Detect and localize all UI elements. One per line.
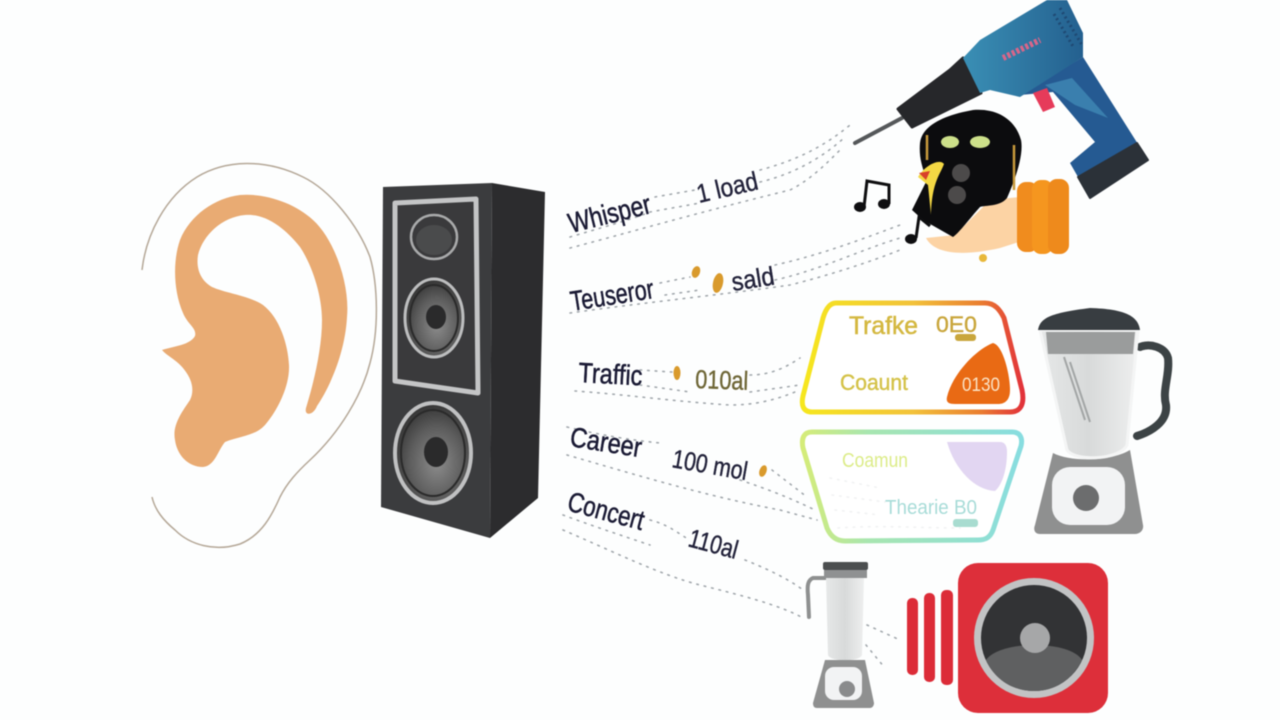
drill battery <box>1078 143 1148 198</box>
device eye <box>970 136 990 148</box>
lid band <box>824 570 867 578</box>
speaker ring <box>974 578 1094 698</box>
drill trigger <box>1033 88 1055 112</box>
tweeter <box>411 215 457 259</box>
speaker cone <box>981 585 1087 691</box>
panel: traffic gradient card <box>802 303 1023 412</box>
value text: 1 load <box>694 166 761 209</box>
row label: Teuseror <box>568 261 776 317</box>
base <box>813 660 874 708</box>
device button <box>948 186 966 204</box>
drill brand mark <box>1003 40 1040 58</box>
card outline <box>802 432 1022 541</box>
panel <box>825 667 862 700</box>
device eye <box>941 136 959 148</box>
icon: tower speaker <box>381 183 545 538</box>
knob <box>839 681 855 697</box>
drill chuck <box>898 58 981 127</box>
icon: power drill <box>855 0 1148 198</box>
sound bar <box>924 593 935 682</box>
icon: large blender <box>1034 308 1168 534</box>
blender jar <box>1040 330 1138 458</box>
icon: ear <box>142 163 376 547</box>
blender handle <box>1137 345 1168 436</box>
label: Coaunt <box>840 370 908 395</box>
value drop <box>711 272 725 294</box>
arm <box>926 197 1025 253</box>
value text: 100 mol <box>670 443 750 486</box>
speaker body <box>958 563 1108 713</box>
side stripe <box>927 135 1014 190</box>
blender lid <box>1038 308 1140 330</box>
bead <box>979 254 987 262</box>
icon: small blender <box>808 562 874 708</box>
card outline <box>802 303 1023 412</box>
blender blade mark <box>1064 357 1090 422</box>
speaker front <box>381 183 492 538</box>
label: Thearie B0 <box>885 497 977 519</box>
drill bit <box>855 118 902 143</box>
note stems <box>864 181 889 207</box>
drill handle <box>1020 57 1148 198</box>
label: Coamun <box>842 450 908 472</box>
drill handle highlight <box>1045 78 1108 118</box>
blender knob <box>1073 485 1099 511</box>
yellow beak <box>918 162 944 215</box>
sound bar <box>907 598 918 675</box>
small value <box>955 334 976 341</box>
ear outer outline <box>142 163 376 547</box>
device body <box>912 110 1022 237</box>
drill rear vents <box>1054 8 1082 48</box>
blender panel <box>1052 467 1125 525</box>
icon: hand with orange cuff <box>926 179 1069 262</box>
cuff band <box>1017 182 1038 252</box>
row label: Career <box>568 421 768 486</box>
blender band <box>1046 332 1135 354</box>
lavender shape <box>947 442 1007 491</box>
label text: Concert <box>564 486 648 536</box>
cuff band <box>1048 179 1069 254</box>
dotted connector lines <box>563 125 960 668</box>
heading: Trafke <box>849 312 918 340</box>
speaker dust cap <box>1020 623 1050 653</box>
label text: Career <box>568 421 644 463</box>
cuff band <box>1032 180 1053 254</box>
red accent <box>919 171 930 180</box>
cone highlight <box>986 645 1082 691</box>
woofer <box>395 403 471 503</box>
ear inner shape <box>162 195 347 467</box>
speaker inset frame <box>395 199 478 393</box>
orange badge <box>947 343 1010 404</box>
note heads <box>854 202 866 212</box>
value text: sald <box>729 261 776 297</box>
label text: Whisper <box>565 188 654 239</box>
value text: 010al <box>695 364 749 396</box>
value text: 110al <box>685 523 742 565</box>
value drop <box>758 464 768 478</box>
label text: Traffic <box>578 357 643 391</box>
row label: Traffic <box>578 357 749 396</box>
value drop <box>690 265 702 279</box>
icon: red speaker <box>907 563 1108 713</box>
speaker side <box>490 183 545 538</box>
value drop <box>674 366 680 380</box>
panel: pale gradient card <box>802 432 1022 541</box>
handle <box>808 578 825 617</box>
icon: black device <box>912 110 1022 237</box>
jar <box>826 577 864 660</box>
label text: Teuseror <box>568 273 656 317</box>
value: 0E0 <box>936 312 977 337</box>
drill body <box>963 0 1083 97</box>
icon: music note <box>854 181 890 212</box>
blender base <box>1034 450 1143 534</box>
row label: Whisper <box>565 166 761 239</box>
lid <box>823 562 868 570</box>
midrange driver <box>405 279 463 357</box>
orange badge: 0130 <box>962 375 1000 396</box>
row label: Concert <box>564 486 742 565</box>
small value <box>953 519 978 527</box>
sound bar <box>941 590 953 685</box>
device button <box>952 164 970 182</box>
icon: music note small <box>905 217 930 244</box>
